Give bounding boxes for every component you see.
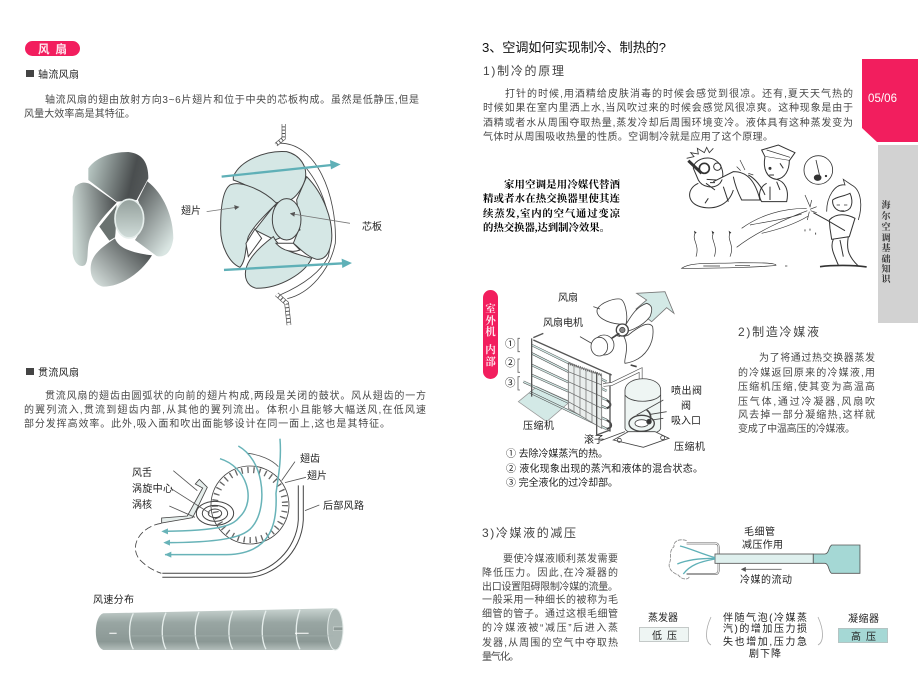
diagram: outdoor unit: [518, 292, 674, 447]
illustration: fan drum: [96, 608, 343, 650]
list: condensation stages: ② 液化现象出现的蒸汽和液体的混合状态。: [506, 462, 703, 475]
explanation in parentheses: [706, 611, 822, 660]
condenser high pressure: 高 压: [851, 630, 876, 643]
labels: capillary tube: 冷媒的流动: [740, 573, 792, 586]
page tab: 05/06: 05/06: [868, 93, 897, 105]
side tab: 海尔空调基础知识: 空: [881, 221, 891, 232]
evaporator low pressure: [640, 611, 688, 642]
labels: cross-flow fan parts: 风舌: [132, 467, 152, 479]
diagram: capillary tube: [669, 540, 860, 579]
labels: outdoor unit parts: ②: [505, 357, 516, 369]
text block: pressure reduction: 降低压力。因此,在冷凝器的: [482, 566, 618, 579]
text block: cooling principle: 打针的时候,用酒精给皮肤消毒的时候会感觉到很凉。还有,夏天天气热的: [505, 87, 853, 100]
labels: capillary tube: 减压作用: [742, 539, 783, 551]
callout: bold text: 精或者水在热交换器里使其连: [483, 192, 621, 205]
girl: [827, 179, 861, 220]
teal panel: [518, 387, 570, 422]
callout: bold text: 家用空调是用冷媒代替酒: [504, 178, 621, 191]
frame: [532, 333, 612, 435]
explanation in parentheses: 剧下降: [749, 647, 781, 660]
labels: outdoor unit parts: ③: [505, 377, 516, 389]
text block: pressure reduction: 的冷媒液被“减压”后进入蒸: [482, 621, 618, 634]
badge: 室外机内部: 部: [485, 355, 496, 368]
evaporator low pressure: 低 压: [652, 629, 677, 642]
title: 3、空调如何实现制冷、制热的?: [482, 40, 666, 55]
badge: 室外机内部: 机: [485, 325, 496, 338]
man: [687, 147, 713, 158]
explanation in parentheses: 汽)的增加压力损: [723, 622, 807, 635]
heading: 轴流风扇: 轴流风扇: [38, 68, 79, 81]
text block: making refrigerant: 风去掉一部分凝缩热,这样就: [738, 408, 875, 421]
text block: pressure reduction: 量气化。: [482, 650, 519, 663]
side tab: 海尔空调基础知识: 基: [881, 242, 891, 253]
heading: 贯流风扇: 贯流风扇: [38, 366, 79, 379]
explanation in parentheses: 失也增加,压力急: [723, 635, 807, 648]
teal air arrow: [636, 292, 674, 322]
labels: outdoor unit parts: 吸入口: [671, 416, 701, 427]
labels: outdoor unit parts: 阀: [681, 399, 691, 412]
illustration: axial fan line drawing: [207, 124, 352, 325]
labels: outdoor unit parts: 风扇电机: [543, 316, 583, 329]
text block: pressure reduction: [482, 552, 618, 663]
text block: cooling principle: 时候如果在室内里洒上水,当风吹过来的时候会感觉风很凉爽。这种现象是由于: [483, 101, 853, 114]
text block: making refrigerant: 为了将通过热交换器蒸发: [759, 351, 875, 364]
condenser high pressure: [838, 612, 888, 643]
text block: axial fan description: 轴流风扇的翅由放射方向3~6片翅片和位于中央的芯板构成。虽然是低静压,但是: [45, 93, 419, 106]
text block: pressure reduction: 一般采用一种细长的被称为毛: [482, 593, 618, 606]
label: 风速分布: 风速分布: [93, 594, 134, 606]
text block: axial fan description: 风量大效率高是其特征。: [24, 107, 135, 120]
text block: cooling principle: 酒精或者水从周围夺取热量,蒸发冷却后周围环境变冷。液体具有这种蒸发变为: [483, 116, 853, 129]
heading: 冷媒液的减压: 3)冷媒液的减压: [482, 525, 576, 540]
badge: 室外机内部: 内: [485, 343, 496, 356]
heat exchanger tubes: [523, 345, 607, 429]
text block: making refrigerant: 的冷媒返回原来的冷媒液,用: [738, 366, 875, 379]
side tab: 海尔空调基础知识: 尔: [881, 210, 891, 221]
explanation in parentheses: 伴随气泡(冷媒蒸: [723, 611, 807, 624]
text block: cooling principle: [483, 87, 853, 143]
brackets: [518, 338, 520, 390]
text block: cooling principle: 气体时从周围吸收热量的性质。空调制冷就是应用了这个原理。: [483, 130, 773, 143]
side tab: 海尔空调基础知识: [878, 145, 918, 323]
vapour: [694, 233, 732, 257]
list: condensation stages: [506, 447, 703, 489]
labels: outdoor unit parts: 滚子: [584, 433, 604, 446]
labels: cross-flow fan parts: [132, 452, 364, 512]
text block: making refrigerant: 变成了中温高压的冷媒液。: [738, 422, 855, 435]
fin block: [568, 363, 602, 428]
text block: pressure reduction: 出口设置阻碍限制冷媒的流量。: [482, 580, 618, 593]
labels: cross-flow fan parts: 翅齿: [300, 452, 320, 465]
label: 芯板: 芯板: [362, 220, 382, 233]
label: 翅片: 翅片: [181, 204, 201, 217]
page tab: 05/06: [862, 59, 918, 142]
side tab: 海尔空调基础知识: 础: [881, 253, 891, 264]
text block: making refrigerant: 压气体,通过冷凝器,风扇吹: [738, 395, 875, 408]
labels: outdoor unit parts: [505, 291, 705, 453]
labels: cross-flow fan parts: 涡旋中心: [132, 482, 173, 495]
labels: capillary tube: [740, 525, 792, 586]
heading: 轴流风扇: [26, 68, 79, 81]
puddle: [682, 263, 787, 268]
motor: [580, 307, 620, 343]
text block: cross-flow fan description: 部分发挥高效率。此外,吸入面和吹出面能够设计在同一面上,这也是其特征。: [24, 417, 390, 430]
music bubble: [804, 156, 833, 184]
spray: [737, 208, 808, 247]
condenser high pressure: 凝缩器: [848, 612, 879, 625]
list: condensation stages: ① 去除冷媒蒸汽的热。: [506, 447, 608, 460]
side tab: 海尔空调基础知识: 知: [881, 263, 891, 274]
nurse: [762, 145, 795, 161]
badge: 室外机内部: 外: [485, 314, 497, 327]
labels: outdoor unit parts: 压缩机: [523, 419, 554, 432]
list: condensation stages: ③ 完全液化的过冷却部。: [506, 476, 618, 489]
text block: cross-flow fan description: [24, 389, 426, 430]
side tab: 海尔空调基础知识: 识: [881, 273, 891, 284]
labels: cross-flow fan parts: 翅片: [307, 469, 327, 482]
diagram: cross-flow fan airflow: [135, 439, 319, 577]
labels: outdoor unit parts: 风扇: [558, 291, 578, 304]
callout: bold text: 续蒸发,室内的空气通过变凉: [483, 207, 621, 220]
text block: pressure reduction: 发器,从周围的空气中夺取热: [482, 636, 618, 649]
badge: 室外机内部: 室: [485, 302, 496, 315]
illustration: shaded axial fan: [73, 152, 173, 287]
labels: outdoor unit parts: 压缩机: [674, 440, 705, 453]
heading: 制造冷媒液: 2)制造冷媒液: [738, 324, 819, 339]
text block: cross-flow fan description: 贯流风扇的翅齿由圆弧状的向前的翅片构成,两段是关闭的鼓状。风从翅齿的一方: [45, 389, 426, 402]
labels: outdoor unit parts: ①: [505, 338, 516, 350]
labels: capillary tube: 毛细管: [744, 525, 775, 538]
callout: bold text: [483, 178, 621, 234]
text block: making refrigerant: [738, 351, 875, 435]
text block: cross-flow fan description: 的翼列流入,贯流到翅齿内部,从其他的翼列流出。体积小且能够大幅送风,在低风速: [24, 403, 426, 416]
section pill: 风扇: [25, 41, 80, 56]
heading: 制冷的原理: 1)制冷的原理: [483, 63, 564, 78]
side tab: 海尔空调基础知识: 海: [881, 199, 891, 210]
side tab: 海尔空调基础知识: 调: [881, 232, 891, 243]
labels: cross-flow fan parts: 后部风路: [323, 499, 364, 512]
badge: 室外机内部: [483, 290, 498, 379]
text block: pressure reduction: 细管的管子。通过这根毛细管: [482, 607, 618, 620]
evaporator low pressure: 蒸发器: [648, 611, 678, 624]
callout: bold text: 的热交换器,达到制冷效果。: [483, 221, 610, 234]
text block: making refrigerant: 压缩机压缩,使其变为高温高: [738, 380, 875, 393]
labels: cross-flow fan parts: 涡核: [132, 498, 152, 511]
heading: 贯流风扇: [26, 366, 79, 379]
text block: pressure reduction: 要使冷媒液顺利蒸发需要: [503, 552, 618, 565]
pipe: [603, 370, 641, 385]
compressor: [625, 379, 661, 435]
labels: outdoor unit parts: 喷出阀: [671, 384, 702, 397]
illustration: cartoon of cooling by evaporation: [682, 145, 867, 268]
text block: axial fan description: [24, 93, 419, 120]
fan blades: [597, 299, 627, 324]
section pill: 风扇: 风 扇: [38, 42, 67, 56]
